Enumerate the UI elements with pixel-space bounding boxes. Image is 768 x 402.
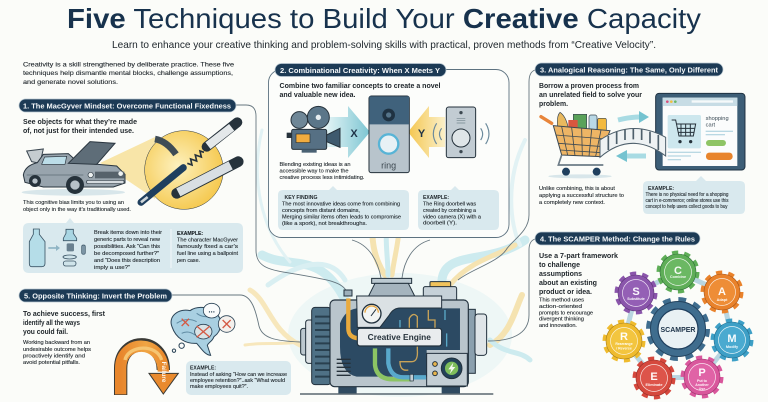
gear: central SCAMPER	[649, 300, 707, 358]
example box	[186, 361, 291, 395]
lead text: identify all the ways	[23, 318, 80, 327]
heading pill 4: 4. The SCAMPER Method: Change the Rules	[540, 234, 695, 244]
lead text: product or idea.	[539, 287, 592, 296]
title: Five Techniques to Build Your Creative Capacity	[67, 3, 701, 34]
example text: EXAMPLE:	[177, 231, 203, 237]
heading pill 3: 3. Analogical Reasoning: The Same, Only Different	[540, 66, 719, 74]
decomposition text	[94, 230, 162, 271]
icon: tablet with shopping cart page	[656, 93, 745, 170]
key finding box: (like a spork), not breakthroughs.	[282, 221, 367, 227]
ribbons of colour flowing from the engine	[245, 130, 530, 397]
panel: analogical reasoning	[535, 63, 745, 214]
icon: bottle broken into parts	[29, 229, 85, 267]
heading pill 3	[535, 63, 723, 76]
example box: employee retention?”..ask “What would	[190, 378, 285, 384]
gear: Modify: Modify	[726, 345, 739, 349]
gear: Rearrange / Reverse: / Reverse	[616, 346, 632, 350]
caption: prompts to encourage	[539, 310, 593, 316]
decomposition text: and “Does this description	[94, 258, 160, 264]
icon: decomposed pens in a yellow circle	[141, 122, 238, 209]
gear: Adapt: A	[718, 286, 726, 298]
caption: This method uses	[539, 298, 585, 304]
example box	[643, 176, 745, 214]
gear: Rearrange / Reverse: Rearrange	[615, 342, 633, 346]
caption: object only in the way it’s traditionally used.	[23, 207, 131, 213]
gear: Eliminate: Eliminate	[646, 383, 662, 387]
heading pill 4	[535, 232, 700, 245]
lead text: To achieve success, first	[23, 309, 105, 318]
gear: Put to Another Use: Another	[695, 383, 709, 387]
example box: Instead of asking “How can we increase	[190, 372, 287, 378]
connector wires to the engine	[172, 70, 535, 342]
caption	[539, 298, 593, 329]
example box: make employees quit?”.	[190, 384, 248, 390]
gear: Put to Another Use: Put to	[697, 379, 707, 383]
icon: brain with crossed-out thoughts	[171, 303, 235, 355]
key finding box: Merging similar items often leads to compromise	[282, 214, 401, 220]
caption: Blending existing ideas is an	[280, 162, 350, 168]
gear: Put to Another Use: Use	[699, 387, 705, 391]
lead text: and valuable new idea.	[280, 90, 356, 99]
lead text: Combine two familiar concepts to create a novel	[280, 81, 440, 90]
caption: and innovation.	[539, 323, 577, 329]
panel: MacGyver mindset	[19, 99, 243, 273]
lead text: Use a 7-part framework	[539, 251, 619, 260]
gear: Combine: C	[674, 265, 682, 277]
icon: Y arrow: Y	[418, 128, 426, 140]
lead text: an unrelated field to solve your	[539, 90, 642, 99]
icon: tablet with shopping cart page: shopping	[706, 116, 729, 122]
caption: a completely new context.	[539, 200, 605, 206]
heading pill 2	[275, 64, 446, 76]
beam of light	[100, 137, 155, 199]
example text	[177, 231, 239, 264]
caption: This cognitive bias limits you to using an	[23, 200, 124, 206]
engine label: Creative Engine	[368, 332, 431, 342]
example box: doorbell (Y).	[423, 220, 458, 226]
heading pill 1: 1. The MacGyver Mindset: Overcome Functional Fixedness	[23, 102, 231, 110]
gear: Combine: Combine	[670, 275, 686, 279]
intro text: and generate novel solutions.	[23, 79, 118, 86]
gear: Eliminate: E	[650, 371, 658, 383]
decomposition text: Break items down into their	[94, 230, 162, 236]
subtitle: Learn to enhance your creative thinking and problem-solving skills with practical, proven methods from “Creative Velocity”.	[112, 39, 656, 51]
heading pill 1	[19, 99, 236, 112]
gear: Modify	[713, 321, 751, 359]
caption	[539, 186, 624, 206]
decomposition text: be decomposed further?”	[94, 251, 159, 257]
caption	[23, 340, 91, 366]
lead text: See objects for what they’re made	[23, 117, 137, 126]
icon: X arrow: X	[350, 128, 358, 140]
gear: Put to Another Use: P	[698, 367, 706, 379]
lead text: problem.	[539, 99, 568, 108]
lead text: to challenge	[539, 260, 580, 269]
lead text: assumptions	[539, 269, 582, 278]
icon: creative engine	[300, 278, 493, 394]
gear diagram	[605, 253, 751, 397]
example box: cart in e-commerce; online stores use this	[646, 198, 729, 204]
icon: U-turn failure arrow	[121, 345, 178, 395]
example text: fuel line using a ballpoint	[177, 251, 239, 257]
gear: Substitute	[617, 274, 655, 312]
lead text: Borrow a proven process from	[539, 81, 639, 90]
icon: plain doorbell with sound waves	[433, 107, 489, 158]
lead text	[280, 81, 440, 99]
caption: accessible way to make the	[280, 168, 348, 174]
icon: tablet with shopping cart page: cart	[706, 123, 716, 129]
lead text	[23, 117, 137, 135]
gear: central SCAMPER: SCAMPER	[660, 325, 696, 334]
caption: Unlike combining, this is about	[539, 186, 615, 192]
key finding box: KEY FINDING	[284, 195, 318, 201]
caption: divergent thinking	[539, 316, 584, 322]
decomposition text: generic parts to reveal new	[94, 237, 160, 243]
gear: Adapt: Adapt	[717, 298, 728, 302]
caption	[280, 162, 365, 181]
icon: brain with crossed-out thoughts: ...	[208, 305, 215, 314]
icon: car	[22, 142, 125, 196]
heading pill 5	[19, 289, 172, 302]
icon: X arrow	[325, 106, 370, 158]
icon: Y arrow	[408, 106, 445, 158]
icon: ring doorbell	[369, 96, 409, 173]
lead text	[539, 81, 642, 108]
caption: applying a successful structure to	[539, 193, 624, 199]
gear: Adapt	[703, 273, 741, 311]
example box: There is no physical need for a shopping	[646, 192, 728, 198]
intro text	[23, 62, 234, 86]
engine label	[357, 328, 442, 346]
gear: Modify: M	[727, 333, 737, 345]
lead text: about an existing	[539, 278, 597, 287]
key finding box	[278, 186, 409, 230]
icon: arrows between cart and tablet	[616, 111, 649, 162]
icon: video camera	[287, 106, 340, 153]
gear: Rearrange / Reverse: R	[620, 331, 628, 343]
example text: pen case.	[177, 258, 200, 264]
decomposition text: imply a use?”	[94, 265, 130, 271]
heading pill 2: 2. Combinational Creativity: When X Meets Y	[280, 66, 440, 75]
example box	[418, 186, 499, 230]
example box: created by combining a	[423, 208, 477, 214]
example box: EXAMPLE:	[190, 366, 216, 372]
gear: Eliminate	[635, 359, 673, 397]
lead text: of, not just for their intended use.	[23, 126, 134, 135]
lead text: you could fail.	[23, 327, 68, 336]
intro text: Creativity is a skill strengthened by deliberate practice. These five	[23, 62, 234, 68]
decomposition text: possibilities. Ask “Can this	[94, 244, 160, 250]
icon: U-turn failure arrow: Failure	[160, 362, 167, 383]
caption: Working backward from an	[23, 340, 90, 346]
caption	[23, 200, 131, 213]
example box: The Ring doorbell was	[423, 202, 476, 208]
key finding box: concepts from distant domains,	[282, 208, 360, 214]
caption: action-oriented	[539, 304, 582, 310]
example box: EXAMPLE:	[423, 195, 449, 201]
panel: combinational creativity	[268, 64, 509, 238]
caption: proactively identify and	[23, 354, 85, 360]
example text: famously fixed a car’s	[177, 244, 238, 250]
caption: avoid potential pitfalls.	[23, 360, 80, 366]
gear: Put to Another Use	[683, 358, 721, 396]
caption: creative process less intimidating.	[280, 175, 365, 181]
gear: Substitute: S	[632, 286, 640, 298]
intro text: techniques help dismantle mental blocks, challenge assumptions,	[23, 70, 233, 77]
icon: bridge	[600, 128, 666, 157]
example box: concept to help users collect goods to buy	[646, 204, 728, 210]
example box	[23, 218, 243, 273]
example box: EXAMPLE:	[648, 186, 674, 192]
panel: SCAMPER method	[535, 232, 751, 397]
lead text	[23, 309, 105, 336]
icon: shopping cart with goods	[541, 112, 612, 178]
gear: Rearrange / Reverse	[605, 322, 643, 360]
gear: Combine	[659, 253, 697, 291]
key finding box: The most innovative ideas come from combining	[282, 202, 400, 208]
icon: ring doorbell: ring	[381, 160, 396, 170]
caption: undesirable outcome helps	[23, 347, 91, 353]
example text: The character MacGyver	[177, 238, 238, 244]
gear: Substitute: Substitute	[627, 297, 645, 301]
panel: opposite thinking	[19, 289, 291, 395]
example box: video camera (X) with a	[423, 214, 482, 220]
lead text	[539, 251, 619, 296]
heading pill 5: 5. Opposite Thinking: Invert the Problem	[24, 292, 168, 300]
